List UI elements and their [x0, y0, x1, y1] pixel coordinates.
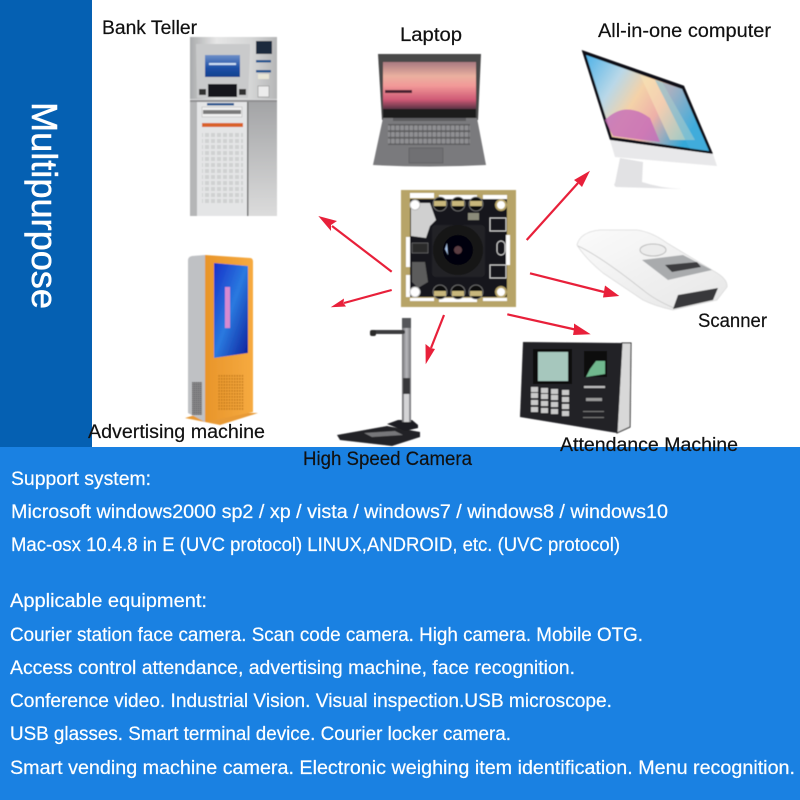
side panel: [0, 0, 92, 447]
text block: applicable equipment: Smart vending machine camera. Electronic weighing item identification. Menu recognition.: [10, 758, 795, 779]
text block: support system: Mac-osx 10.4.8 in E (UVC protocol) LINUX,ANDROID, etc. (UVC protocol): [11, 535, 620, 556]
camera module: [401, 190, 516, 307]
label: High Speed Camera: High Speed Camera: [303, 449, 472, 470]
arrow: to bank teller: [318, 216, 392, 272]
label: All-in-one computer: All-in-one computer: [598, 21, 772, 42]
text block: support system: Microsoft windows2000 sp2 / xp / vista / windows7 / windows8 / windows10: [11, 502, 668, 523]
info panel background: [0, 447, 800, 800]
arrows: [318, 171, 619, 364]
text block: support system: [11, 469, 668, 556]
arrow: to high speed camera: [426, 315, 444, 364]
device: laptop: [373, 54, 486, 166]
label: Laptop: Laptop: [400, 25, 462, 46]
device: advertising machine: [185, 255, 258, 425]
text block: applicable equipment: [10, 591, 795, 779]
arrow: to attendance machine: [507, 314, 591, 335]
text block: applicable equipment: Conference video. Industrial Vision. Visual inspection.USB microscope.: [10, 691, 612, 712]
arrow: to all-in-one computer: [527, 171, 590, 240]
side panel heading: Multipurpose: [24, 102, 65, 309]
device: high speed camera stand: [337, 318, 420, 446]
device: bank teller ATM: [190, 37, 277, 216]
label: Attendance Machine: Attendance Machine: [560, 435, 738, 456]
arrow: to scanner: [530, 273, 619, 298]
label: Bank Teller: Bank Teller: [102, 18, 198, 39]
label: Advertising machine: Advertising machine: [88, 422, 265, 443]
text block: applicable equipment: USB glasses. Smart terminal device. Courier locker camera.: [10, 724, 511, 745]
text block: applicable equipment: Access control attendance, advertising machine, face recognition.: [10, 658, 575, 679]
device: scanner: [577, 230, 727, 310]
device: attendance machine: [520, 342, 631, 433]
arrow: to advertising machine: [331, 290, 392, 307]
text block: applicable equipment: Applicable equipment:: [10, 591, 207, 612]
text block: support system: Support system:: [11, 469, 151, 490]
text block: applicable equipment: Courier station face camera. Scan code camera. High camera. Mobile OTG.: [10, 625, 643, 646]
device: all-in-one computer: [582, 50, 717, 189]
label: Scanner: Scanner: [698, 311, 768, 332]
